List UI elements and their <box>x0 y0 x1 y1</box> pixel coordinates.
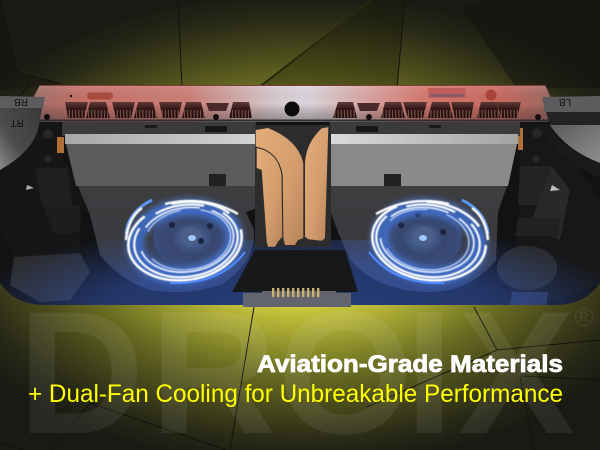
right metal shield <box>330 122 520 186</box>
bottom charging connector <box>232 250 358 307</box>
RB label: RB <box>14 96 28 107</box>
dark facet top right <box>462 0 600 88</box>
left metal shield <box>62 122 256 186</box>
left internals <box>10 129 90 302</box>
right fan shroud <box>330 186 507 292</box>
left fan shroud <box>78 186 262 292</box>
connector pins <box>272 288 319 297</box>
usb-a port <box>428 88 466 98</box>
rear metal bar <box>32 85 552 122</box>
right internals <box>497 128 570 305</box>
right fan <box>367 194 491 288</box>
headline: Aviation-Grade Materials <box>257 351 563 378</box>
vent slots <box>65 102 521 118</box>
left shoulder buttons <box>0 96 45 170</box>
right pipe <box>305 127 328 241</box>
usb-c port <box>87 92 113 100</box>
screw holes <box>44 95 541 120</box>
middle pipe <box>256 128 303 245</box>
caption <box>28 351 563 408</box>
copper heat pipes <box>255 125 331 247</box>
fan hub <box>384 208 462 268</box>
LB label: LB <box>559 96 571 107</box>
fan hub <box>153 208 231 268</box>
right shoulder buttons <box>542 96 600 178</box>
handheld device <box>0 85 600 307</box>
spinning air rings <box>123 194 247 288</box>
audio jack <box>486 90 496 100</box>
spinning air rings <box>367 194 491 288</box>
left fan <box>123 194 247 288</box>
outer left pipe <box>257 148 282 247</box>
dark facet top left <box>0 0 62 90</box>
RT label: RT <box>10 117 24 128</box>
blue underglow <box>0 240 600 305</box>
camera hole <box>284 102 300 116</box>
air tails <box>126 200 245 283</box>
registered mark watermark: ® <box>574 302 594 332</box>
device chassis <box>0 118 600 305</box>
air tails <box>369 200 488 283</box>
dark facet top middle <box>258 0 405 88</box>
subheadline: + Dual-Fan Cooling for Unbreakable Performance <box>28 380 563 408</box>
